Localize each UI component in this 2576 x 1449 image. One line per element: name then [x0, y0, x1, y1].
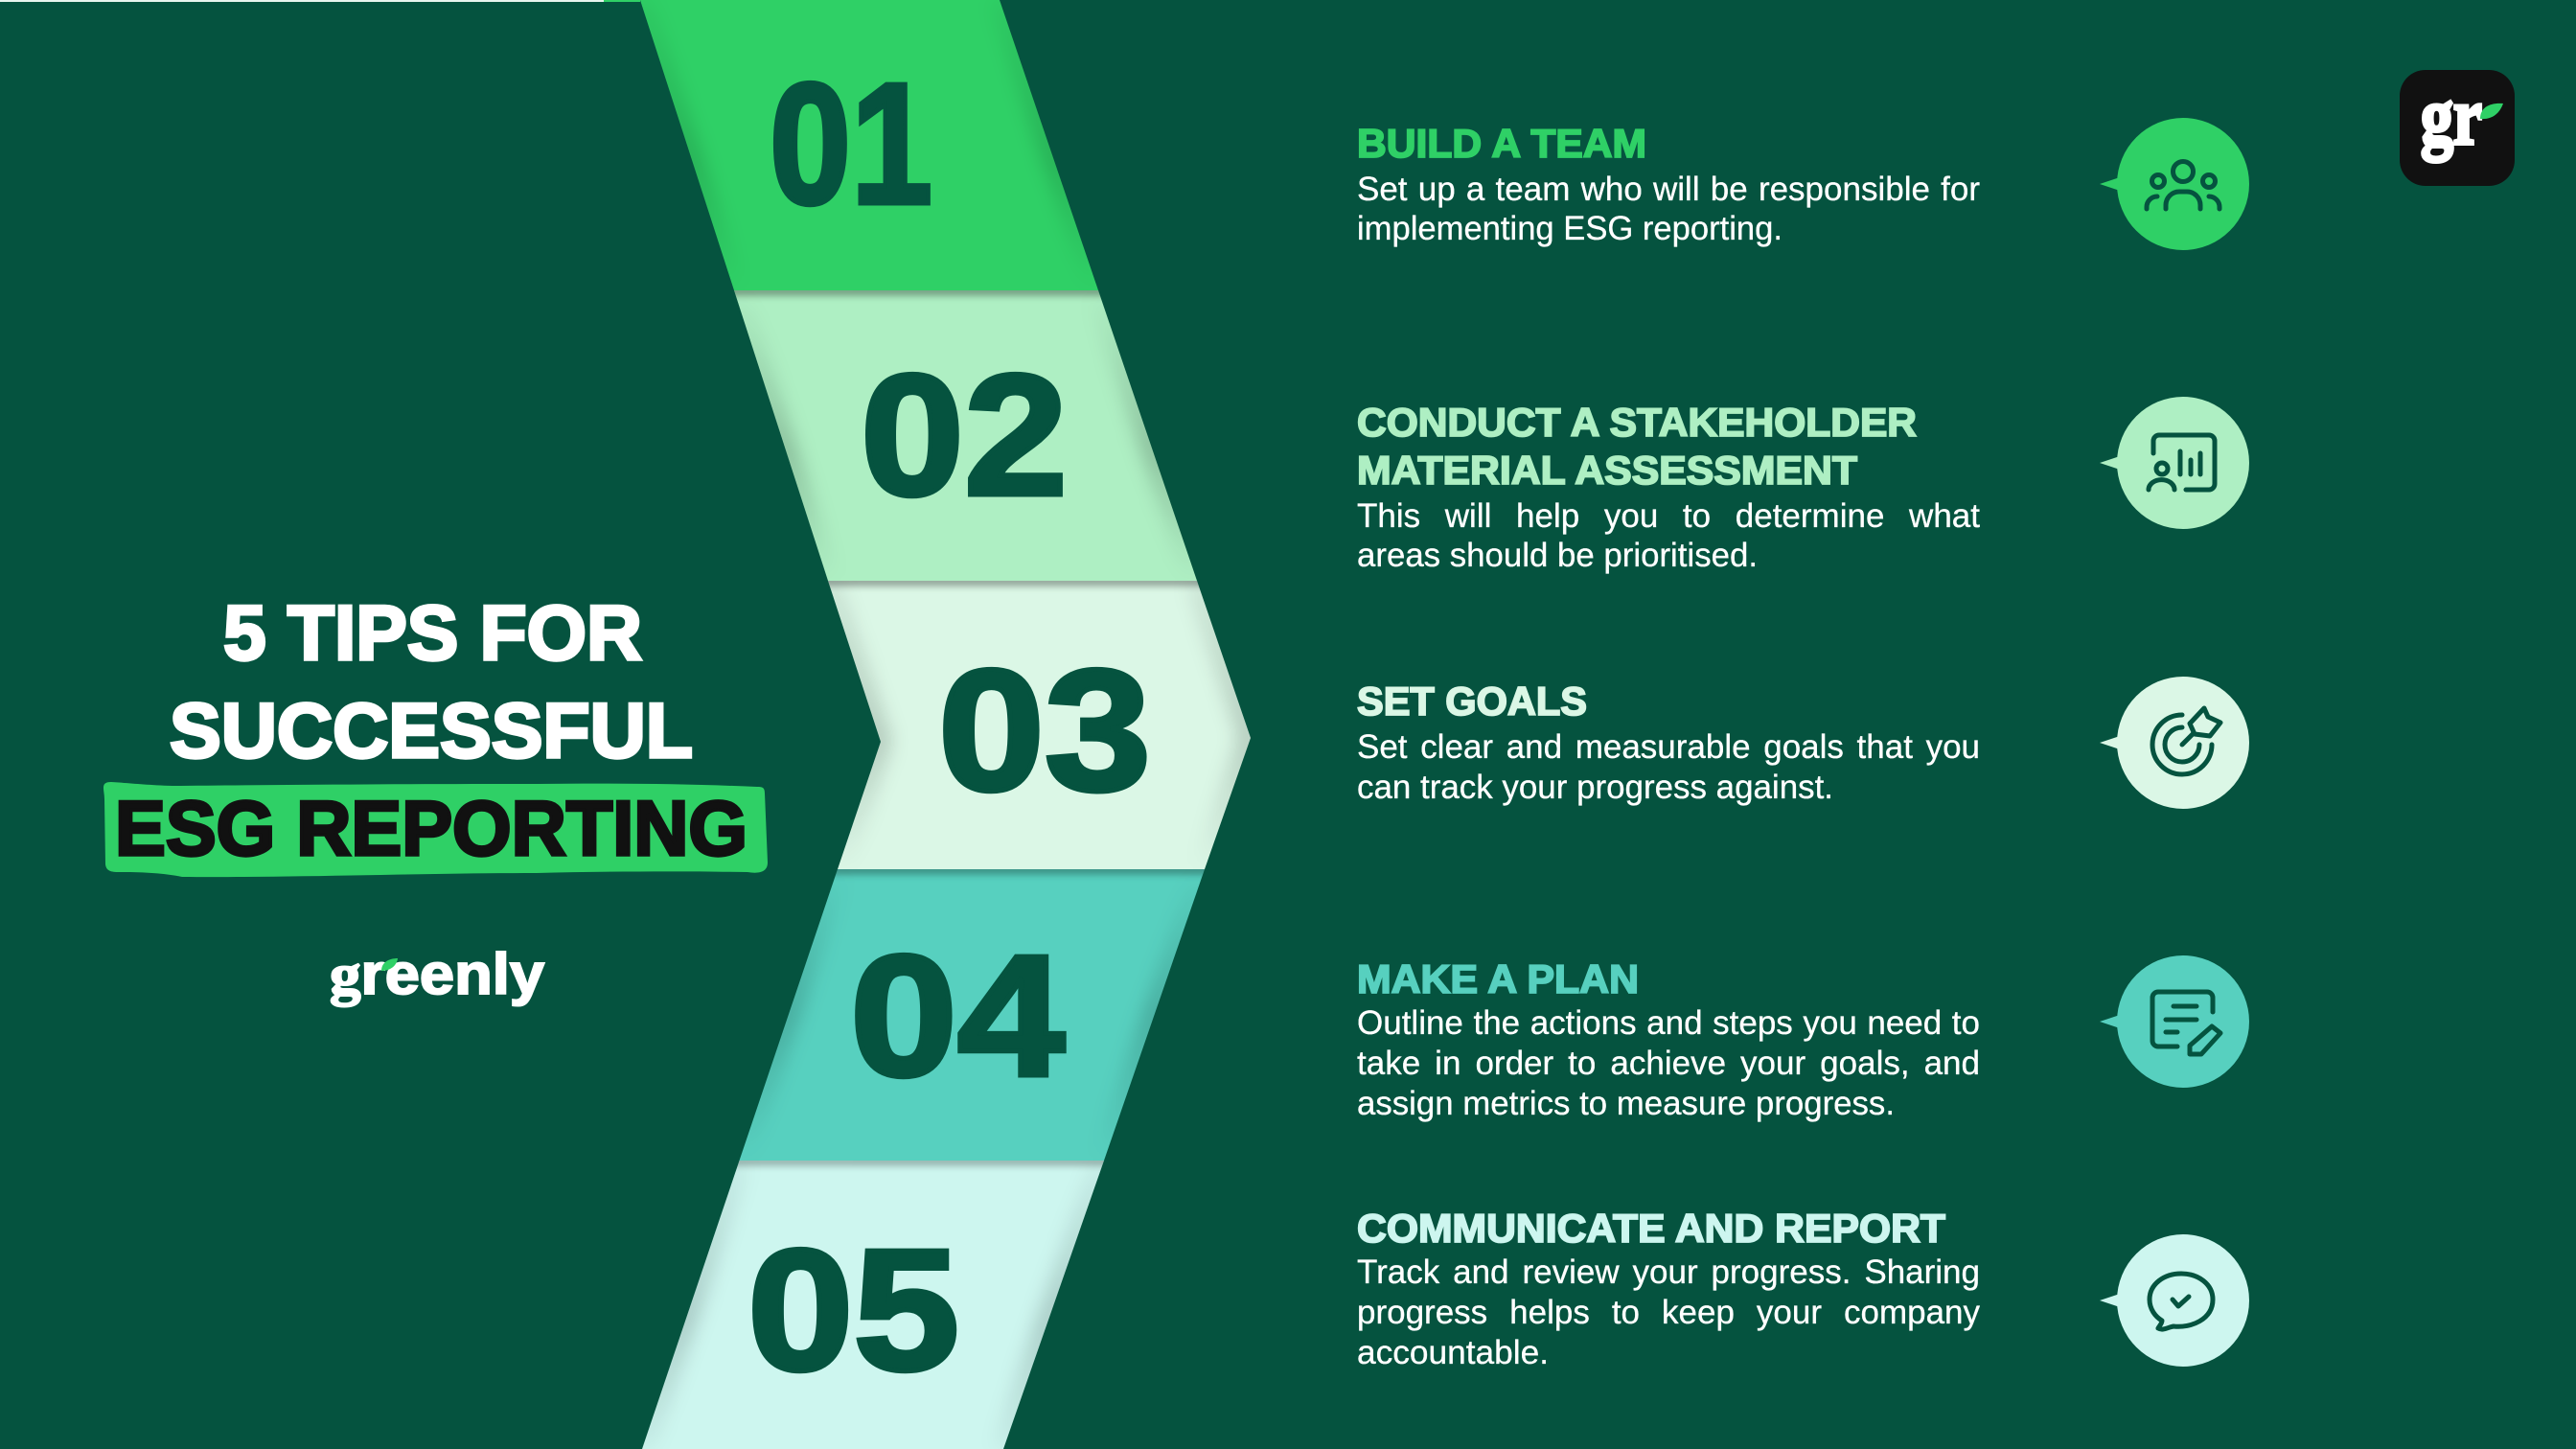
tip 4 body line 2: take in order to achieve your goals, and — [1357, 1045, 1980, 1082]
tip 2 text — [1357, 400, 1980, 574]
segment 02 — [734, 290, 1197, 581]
tip 5 body line 3: accountable. — [1357, 1334, 1549, 1371]
tip 3 body line 1: Set clear and measurable goals that you — [1357, 728, 1980, 766]
tip 1 body line 1: Set up a team who will be responsible for — [1357, 171, 1980, 208]
icon: chart presentation — [2100, 397, 2249, 529]
title block — [104, 590, 768, 877]
tip 5 body line 1: Track and review your progress. Sharing — [1357, 1254, 1980, 1291]
tip 2 body line 1: This will help you to determine what — [1357, 497, 1980, 535]
badge leaf — [2480, 104, 2503, 119]
tip 2 heading line 1: CONDUCT A STAKEHOLDER — [1357, 400, 1917, 445]
title line 3: ESG REPORTING — [115, 786, 748, 872]
segment 01: 01 — [770, 48, 932, 241]
top edge line — [0, 0, 640, 2]
tip 2 body line 2: areas should be prioritised. — [1357, 537, 1758, 574]
tip 4 body line 1: Outline the actions and steps you need to — [1357, 1004, 1980, 1042]
tip 3 heading: SET GOALS — [1357, 678, 1587, 724]
greenly logo: greenly — [330, 942, 545, 1006]
tip 3 body line 2: can track your progress against. — [1357, 769, 1833, 806]
icon: speech bubble check — [2100, 1234, 2249, 1367]
segment 04 — [728, 865, 1227, 1161]
highlight brush — [104, 782, 768, 877]
tip 5 body line 2: progress helps to keep your company — [1357, 1294, 1980, 1331]
logo leaf — [381, 958, 398, 971]
chevron band — [632, 0, 1265, 1449]
tip 1 heading: BUILD A TEAM — [1357, 121, 1646, 166]
tip 4 heading: MAKE A PLAN — [1357, 956, 1639, 1001]
tip 1 text — [1357, 121, 1980, 247]
tip 4 text — [1357, 956, 1980, 1122]
icon: target — [2100, 677, 2249, 809]
title line 2: SUCCESSFUL — [170, 688, 693, 774]
segment 01 — [640, 0, 1098, 290]
segment 02: 02 — [861, 339, 1068, 532]
tip 5 heading: COMMUNICATE AND REPORT — [1357, 1206, 1945, 1251]
segment 04: 04 — [850, 920, 1065, 1113]
tip 5 text — [1357, 1206, 1980, 1371]
tip 3 text — [1357, 678, 1980, 806]
icon: plan document — [2100, 955, 2249, 1088]
icon: team — [2100, 118, 2249, 250]
app badge — [2400, 70, 2515, 186]
tip 2 heading line 2: MATERIAL ASSESSMENT — [1357, 448, 1857, 493]
segment 03: 03 — [938, 634, 1151, 827]
segment 03 — [805, 577, 1265, 869]
badge letters: gr — [2421, 70, 2482, 162]
tip 1 body line 2: implementing ESG reporting. — [1357, 210, 1782, 247]
segment 05: 05 — [748, 1214, 959, 1407]
segment 05 — [632, 1157, 1131, 1449]
tip 4 body line 3: assign metrics to measure progress. — [1357, 1085, 1895, 1122]
title line 1: 5 TIPS FOR — [223, 590, 642, 677]
